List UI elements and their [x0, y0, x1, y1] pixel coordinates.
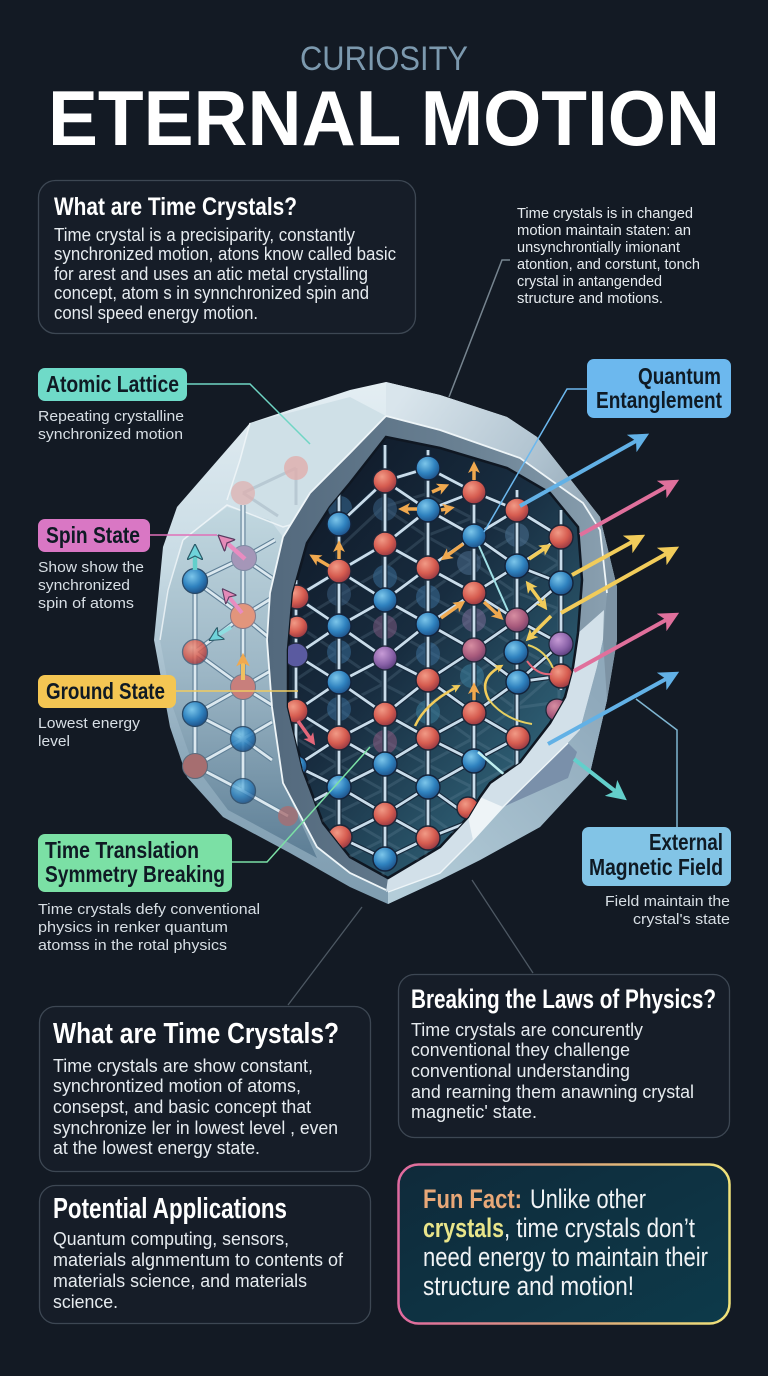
text block: top panel body: synchronized motion, atons know called basic	[54, 244, 396, 264]
label: atomic lattice	[38, 368, 310, 444]
label: spin state: spin of atoms	[38, 595, 134, 612]
text block: top panel body: for arest and uses an atic metal crystalling	[54, 264, 368, 284]
panel: breaking the laws of physics: conventional they challenge	[411, 1039, 630, 1060]
label: time translation symmetry breaking: Time crystals defy conventional	[38, 901, 260, 918]
curved traces and entanglement line	[298, 546, 553, 777]
panel: breaking the laws of physics: magnetic' state.	[411, 1101, 537, 1122]
text block: top right description: structure and motions.	[517, 290, 663, 307]
back lattice	[294, 471, 559, 896]
panel: what are time crystals (bottom): Time crystals are show constant,	[53, 1055, 313, 1076]
back lattice atoms	[327, 496, 529, 754]
callout: fun fact: crystals	[423, 1213, 504, 1243]
panel: breaking the laws of physics: and rearning them anawning crystal	[411, 1081, 694, 1102]
label: ground state: Lowest energy	[38, 715, 141, 732]
text block: top right description: motion maintain staten: an	[517, 222, 691, 239]
label: time translation symmetry breaking: Time Translation	[45, 837, 199, 863]
panel: potential applications: Potential Applications	[53, 1193, 287, 1225]
crystal top right band	[386, 382, 617, 773]
label: quantum entanglement	[484, 359, 731, 532]
label: atomic lattice: Repeating crystalline	[38, 408, 184, 425]
panel: potential applications: science.	[53, 1291, 118, 1312]
panel: potential applications: Quantum computing, sensors,	[53, 1228, 289, 1249]
text block: top panel body: Time crystal is a precisiparity, constantly	[54, 225, 355, 245]
atomic lattice inside window	[284, 445, 573, 896]
red atoms	[284, 469, 573, 850]
label: ground state	[38, 675, 298, 750]
label: time translation symmetry breaking: physics in renker quantum	[38, 919, 228, 936]
crystal left translucent face	[160, 507, 317, 858]
panel: breaking the laws of physics: Time crystals are concurently	[411, 1019, 644, 1040]
panel: what are time crystals (bottom): synchrontized motion of atoms,	[53, 1075, 301, 1096]
panel: what are time crystals (bottom)	[40, 1006, 370, 1172]
label: ground state: level	[38, 733, 70, 750]
panel: potential applications: materials science, and materials	[53, 1270, 307, 1291]
callout: fun fact: structure and motion!	[423, 1271, 634, 1301]
crystal edge highlights	[267, 416, 607, 890]
title: eternal motion: ETERNAL MOTION	[48, 74, 720, 162]
label: atomic lattice: Atomic Lattice	[46, 371, 179, 397]
text block: top right description: unsynchrontially imionant	[517, 239, 681, 256]
connectors: crystal to bottom panels	[288, 880, 533, 1005]
label: external magnetic field: crystal's state	[633, 911, 730, 928]
panel: potential applications	[40, 1186, 370, 1324]
text block: top right description: Time crystals is in changed	[517, 205, 693, 222]
inner motion arrows	[317, 470, 497, 700]
label: time translation symmetry breaking	[38, 747, 370, 954]
left face arrows	[195, 543, 245, 680]
label: spin state: synchronized	[38, 577, 130, 594]
crystal top left facet	[227, 397, 386, 527]
label: spin state: Show show the	[38, 559, 144, 576]
illustration: time crystal	[154, 382, 617, 904]
crystal lower facet	[503, 743, 577, 807]
panel: what are time crystals (bottom): synchronize ler in lowest level , even	[53, 1117, 338, 1138]
crystal outer shell	[154, 382, 617, 904]
panel: what are time crystals (bottom): consepst, and basic concept that	[53, 1096, 311, 1117]
callout: fun fact: Unlike other	[530, 1184, 646, 1214]
arrows: external field vectors	[520, 441, 666, 791]
callout: fun fact: , time crystals don’t	[504, 1213, 695, 1243]
label: external magnetic field: Field maintain the	[605, 893, 730, 910]
crystal lower outer band	[388, 640, 607, 904]
connector: description to crystal	[449, 260, 510, 397]
purple atoms	[284, 608, 573, 721]
blue atoms	[287, 456, 573, 871]
callout: fun fact: Fun Fact:	[423, 1184, 522, 1214]
label: quantum entanglement: Quantum	[638, 363, 721, 389]
text block: top panel body: concept, atom s in synnchronized spin and	[54, 283, 369, 303]
label: external magnetic field	[582, 699, 731, 928]
label: time translation symmetry breaking: Symmetry Breaking	[45, 861, 225, 887]
crystal lower right bright band	[386, 610, 604, 892]
text block: top right description: crystal in antangended	[517, 273, 662, 290]
lattice bonds	[296, 445, 561, 870]
inner yellow arrows	[415, 549, 551, 726]
label: atomic lattice: synchronized motion	[38, 426, 183, 443]
text block: top right description	[517, 205, 700, 307]
text block: top right description: atontion, and corstunt, tonch	[517, 256, 700, 273]
panel: breaking the laws of physics: conventional understanding	[411, 1060, 630, 1081]
text block: top panel body: consl speed energy motion.	[54, 303, 258, 323]
double headed arrow	[531, 588, 542, 603]
ghost lattice on left face	[182, 456, 308, 826]
label: quantum entanglement: Entanglement	[596, 387, 722, 413]
callout: fun fact	[398, 1164, 730, 1324]
text block: top panel body	[54, 225, 396, 323]
label: ground state: Ground State	[46, 678, 165, 704]
crystal frame	[267, 416, 607, 890]
label: external magnetic field: External	[649, 829, 723, 855]
label: spin state	[38, 519, 217, 612]
callout: fun fact: need energy to maintain their	[423, 1242, 708, 1272]
panel: what are time crystals (top)	[38, 180, 416, 334]
label: external magnetic field: Magnetic Field	[589, 854, 723, 880]
label: time translation symmetry breaking: atomss in the rotal physics	[38, 937, 227, 954]
title: curiosity: CURIOSITY	[300, 40, 468, 78]
heading: what are time crystals: What are Time Crystals?	[54, 193, 297, 221]
panel: potential applications: materials algnmentum to contents of	[53, 1249, 344, 1270]
lattice window	[288, 437, 582, 878]
panel: breaking the laws of physics	[398, 974, 730, 1138]
panel: what are time crystals (bottom): at the lowest energy state.	[53, 1137, 260, 1158]
panel: what are time crystals (bottom): What are Time Crystals?	[53, 1018, 339, 1050]
label: spin state: Spin State	[46, 522, 140, 548]
